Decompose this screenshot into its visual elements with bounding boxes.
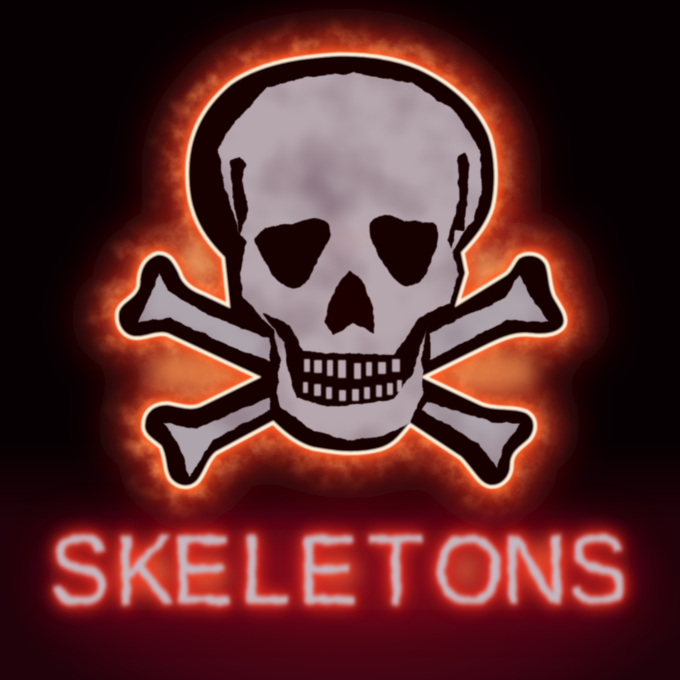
eye: left: [255, 218, 330, 288]
fire glow behind skull: [117, 54, 566, 487]
skull: [218, 73, 482, 440]
title: SKELETONS: SKELETONS: [49, 516, 628, 625]
bone: upper left: [138, 273, 270, 362]
silhouette outline: [117, 54, 566, 487]
cheek tint: [317, 228, 373, 252]
bone: lower left: [163, 397, 270, 477]
skull and crossbones emblem: [117, 54, 566, 487]
mouth band: [262, 302, 452, 407]
temple: left: [230, 156, 248, 237]
bone: upper right: [430, 275, 548, 360]
background: [0, 471, 680, 680]
teeth: [303, 359, 402, 401]
title glow: [50, 530, 630, 610]
bone: lower right: [422, 402, 520, 468]
eye: right: [370, 215, 438, 286]
nose: [325, 270, 374, 335]
temple: right: [448, 152, 470, 250]
